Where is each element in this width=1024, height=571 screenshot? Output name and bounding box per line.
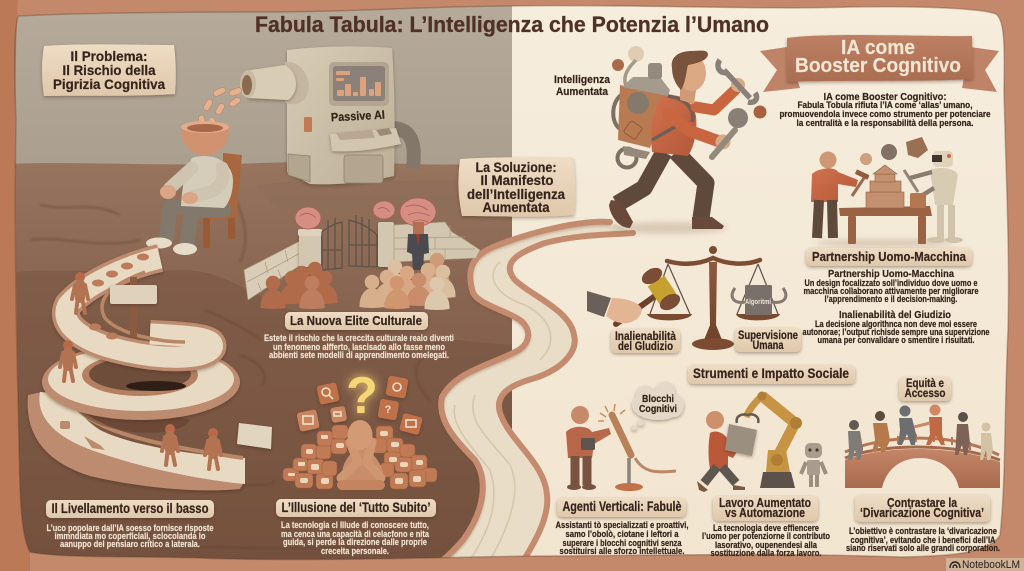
winding river path between panels (427, 222, 633, 571)
text: illusione paragraph: guida, si perde la direzione dalle proprie (283, 537, 427, 547)
label: Contrastare la Divaricazione: Contrastare la (887, 495, 958, 510)
backpack hoses (613, 93, 636, 168)
text: giudizio paragraph (802, 309, 990, 345)
banner: IA come Booster Cognitivo (760, 35, 999, 92)
thought cloud (632, 382, 684, 430)
robot (904, 151, 963, 243)
text: Intelligenza Aumentata: Aumentata (556, 86, 609, 98)
backpack (618, 63, 670, 159)
text: illusione paragraph: ma cenca una capacità di celacfono e nita (281, 529, 430, 539)
text: agenti paragraph (556, 520, 688, 556)
label: Contrastare la Divaricazione (855, 495, 990, 522)
algoritmi block (732, 285, 786, 315)
machine: Passive AI (198, 46, 414, 184)
text: lavoro paragraph: lasorativo, oupenendesi alla (715, 540, 818, 550)
upper sign (110, 277, 157, 337)
arms (170, 168, 223, 196)
shoes (146, 238, 197, 255)
right pan (736, 264, 780, 320)
label: Il Problema: Pigrizia Cognitiva (53, 76, 165, 92)
banner: IA come Booster Cognitivo: IA come (841, 37, 915, 59)
bowl head (181, 121, 229, 155)
runner with jetpack (609, 46, 766, 234)
worker (697, 411, 745, 492)
pills falling (198, 86, 243, 130)
text: partnership paragraph: Un design focalizzato soll’individuo dove uomo e (804, 278, 978, 288)
floating shapes (860, 137, 928, 165)
mallet tool (712, 108, 748, 157)
label: Il Problema: Il Rischio della (62, 62, 156, 78)
label: Lavoro Aumentato: vs Automazione (725, 505, 805, 520)
agent scene: person and pen tool (566, 382, 684, 491)
label: La Soluzione: Il Manifesto (480, 172, 554, 188)
text: giudizio paragraph: umana per convalidare o smentire i risuitati. (818, 335, 974, 345)
icon: grey exhaust pipe (394, 128, 414, 168)
text: agenti paragraph: superare i blocchi cognitivi senza (562, 538, 682, 548)
carried box (725, 424, 757, 456)
question mark: ? (346, 367, 378, 425)
screen (329, 62, 389, 106)
partnership scene: human and robot building (811, 137, 963, 247)
gavel (616, 264, 683, 324)
top ring (66, 254, 212, 357)
label: Supervisione Umana: Umana (752, 338, 784, 352)
bridge body (845, 449, 1000, 488)
text: booster paragraph: promuovendola invece como strumento per potenciare (780, 109, 990, 119)
label: Inalienabilità del Giudizio (611, 329, 680, 353)
pen tool on stand (598, 404, 676, 491)
scale pillar (692, 246, 734, 350)
title: Fabula Tabula: L’Intelligenza che Potenzia l’Umano (255, 12, 769, 37)
heading: Strumenti e Impatto Sociale: Strumenti e Impatto Sociale (693, 365, 849, 381)
right gate post (378, 222, 394, 267)
left pan (647, 264, 692, 320)
brains (295, 198, 436, 229)
text: booster paragraph: la centralità e la responsabilità della persona. (796, 118, 974, 128)
sweater torso (181, 156, 233, 208)
label: Agenti Verticali (557, 498, 686, 517)
human (811, 152, 870, 238)
text: elite paragraph: Estete il rischio che la creccita culturale realo diventi (264, 333, 454, 343)
hands (160, 185, 176, 199)
label: Illusione: L’Illusione del ‘Tutto Subito’ (282, 499, 430, 515)
machine doors (288, 154, 383, 183)
legs (617, 152, 706, 218)
robot arm and worker scene (697, 392, 826, 492)
text: agenti paragraph: samo l’obolò, ciotane i leftori a (566, 529, 679, 539)
label: Lavoro Aumentato: Lavoro Aumentato (719, 495, 811, 510)
floating tiles (296, 375, 423, 435)
dispensing tube (240, 62, 309, 104)
text: contrastare paragraph: cognitiva’, evitando che i benefici dell’IA (850, 535, 996, 545)
text: giudizio paragraph: Inalienabilità del Giudizio (839, 309, 951, 321)
floating balls (612, 46, 766, 118)
label: Lavoro Aumentato (713, 495, 818, 521)
text: elite paragraph: un fenomeno alfferto, lascisado allo fasse meno (273, 342, 445, 352)
seated person with empty bowl head (146, 121, 242, 255)
machine body (287, 46, 395, 184)
text: partnership paragraph (804, 268, 978, 304)
text: illusione paragraph: creceita personale. (321, 546, 389, 556)
label: Il Problema (42, 44, 176, 96)
crowd light (359, 253, 456, 310)
small walking figures (60, 272, 221, 469)
label: Il Problema: Il Problema: (70, 48, 148, 64)
text: lavoro paragraph: l’uomo per potenziorne il contributo (702, 531, 830, 541)
text: lavoro paragraph: sostituzione dalla forza lavoro. (710, 548, 822, 558)
text: booster paragraph: IA come Booster Cognitivo: (824, 91, 946, 103)
torso (651, 95, 696, 156)
label: La Soluzione: dell’Intelligenza (467, 186, 565, 202)
text: elite paragraph (264, 333, 454, 360)
text: illusione paragraph: La tecnologia cl Illude di conoscere tutto, (281, 520, 429, 530)
label: Equità e Accesso (899, 376, 951, 401)
text: Blocchi Cognitivi (639, 394, 677, 415)
NotebookLM badge: NotebookLM (962, 559, 1020, 571)
bridge people (848, 404, 993, 460)
label: Equità e Accesso: Equità e (906, 376, 944, 390)
person with tablet (566, 406, 611, 490)
label: Supervisione Umana (735, 328, 801, 352)
text: Blocchi Cognitivi: Cognitivi (639, 404, 677, 415)
chair (200, 153, 242, 248)
label: Inalienabilità del Giudizio: Inalienabilità (615, 329, 676, 343)
text: partnership paragraph: Partnership Uomo-Macchina (828, 268, 954, 280)
table (839, 206, 932, 244)
businessman (407, 222, 429, 270)
left brick wall (244, 240, 305, 300)
text: Intelligenza Aumentata: Intelligenza (554, 74, 611, 86)
bridge with diverse people (845, 404, 1000, 488)
label: La Soluzione: Aumentata (482, 199, 550, 215)
scales of justice (587, 246, 786, 350)
label: Equità e Accesso: Accesso (904, 386, 946, 400)
iron gate (322, 215, 377, 270)
text: lavoro paragraph (702, 523, 830, 558)
text: Blocchi Cognitivi: Blocchi (642, 394, 674, 405)
text: booster paragraph: Fabula Tobula rifiuta l’IA come ‘allas’ umano, (798, 100, 972, 110)
text: booster paragraph (780, 91, 990, 128)
legs (167, 205, 224, 242)
head (672, 51, 708, 104)
crowd orange (260, 262, 338, 309)
text: contrastare paragraph: L’obiettivo è contrastare la ‘divaricazione (849, 526, 997, 536)
spiral road (28, 254, 272, 490)
text: livellamento paragraph: L’uco popolare dall’IA soesso fornisce risposte (46, 523, 214, 533)
text: Passive AI: Passive AI (331, 108, 385, 124)
gate and wall with elite brains (244, 198, 480, 310)
text: livellamento paragraph (46, 523, 214, 549)
arms (668, 90, 735, 141)
text: agenti paragraph: sostituirsi alle sforzo intellettuale. (560, 546, 684, 556)
hand and sleeve (587, 291, 642, 323)
label: Inalienabilità del Giudizio: del Gludizio (618, 339, 673, 353)
text: partnership paragraph: l’apprendimento e il decision-making. (824, 294, 958, 304)
text: livellamento paragraph: aanuppo del pensiaro critico a laterala. (60, 539, 200, 549)
right brick wall (394, 222, 480, 262)
left gate post (298, 229, 322, 267)
text: agenti paragraph: Assistanti tò specializzati e proattivi, (556, 520, 688, 530)
illusion: pile of app tiles with thinker: ? (385, 404, 392, 416)
algoritmi block: Algoritmi (745, 297, 771, 306)
illusion: pile of app tiles with thinker (283, 367, 437, 490)
label: Agenti Verticali: Agenti Verticali: Fabulè (562, 499, 682, 514)
middle ring (42, 344, 240, 420)
label: Contrastare la Divaricazione: ‘Divaricazione Cognitiva’ (860, 505, 984, 520)
wrench (718, 60, 757, 102)
text: lavoro paragraph: La tecnologia deve effiencere (713, 523, 819, 533)
text: livellamento paragraph: immndiata mo coperficiali, sclocolanda lo (54, 531, 206, 541)
bottom tier (28, 392, 245, 490)
scale beam (667, 258, 760, 264)
small robot (801, 443, 826, 487)
text: Intelligenza Aumentata (554, 74, 611, 98)
label: Supervisione Umana: Supervisione (738, 328, 798, 342)
text: giudizio paragraph: La decisione algorithnca non deve moi essere (815, 319, 977, 329)
label: La Soluzione: La Soluzione: (476, 159, 556, 175)
robotic arm (737, 392, 802, 488)
railing (845, 434, 999, 456)
block tower (866, 165, 904, 208)
lower sign (237, 420, 272, 460)
text: contrastare paragraph (846, 526, 1000, 553)
thinker figure (337, 420, 385, 490)
label: La Nuova Elite Culturale: La Nuova Elite Culturale (290, 313, 422, 328)
text: elite paragraph: abbienti sete modelli di apprendimento omelegati. (269, 350, 449, 360)
label: La Soluzione (458, 157, 575, 217)
text: partnership paragraph: macchina collaborano attivamente per migliorare (804, 286, 978, 296)
shoes (609, 200, 633, 228)
keyboard (330, 128, 401, 151)
tile pile (283, 425, 437, 489)
banner: IA come Booster Cognitivo: Booster Cognitivo (795, 55, 961, 77)
label: Il Livellamento: Il Livellamento verso il basso (52, 500, 208, 516)
debris on road (60, 421, 105, 450)
text: illusione paragraph (281, 520, 430, 556)
label: Partnership: Partnership Uomo-Macchina (812, 249, 967, 264)
